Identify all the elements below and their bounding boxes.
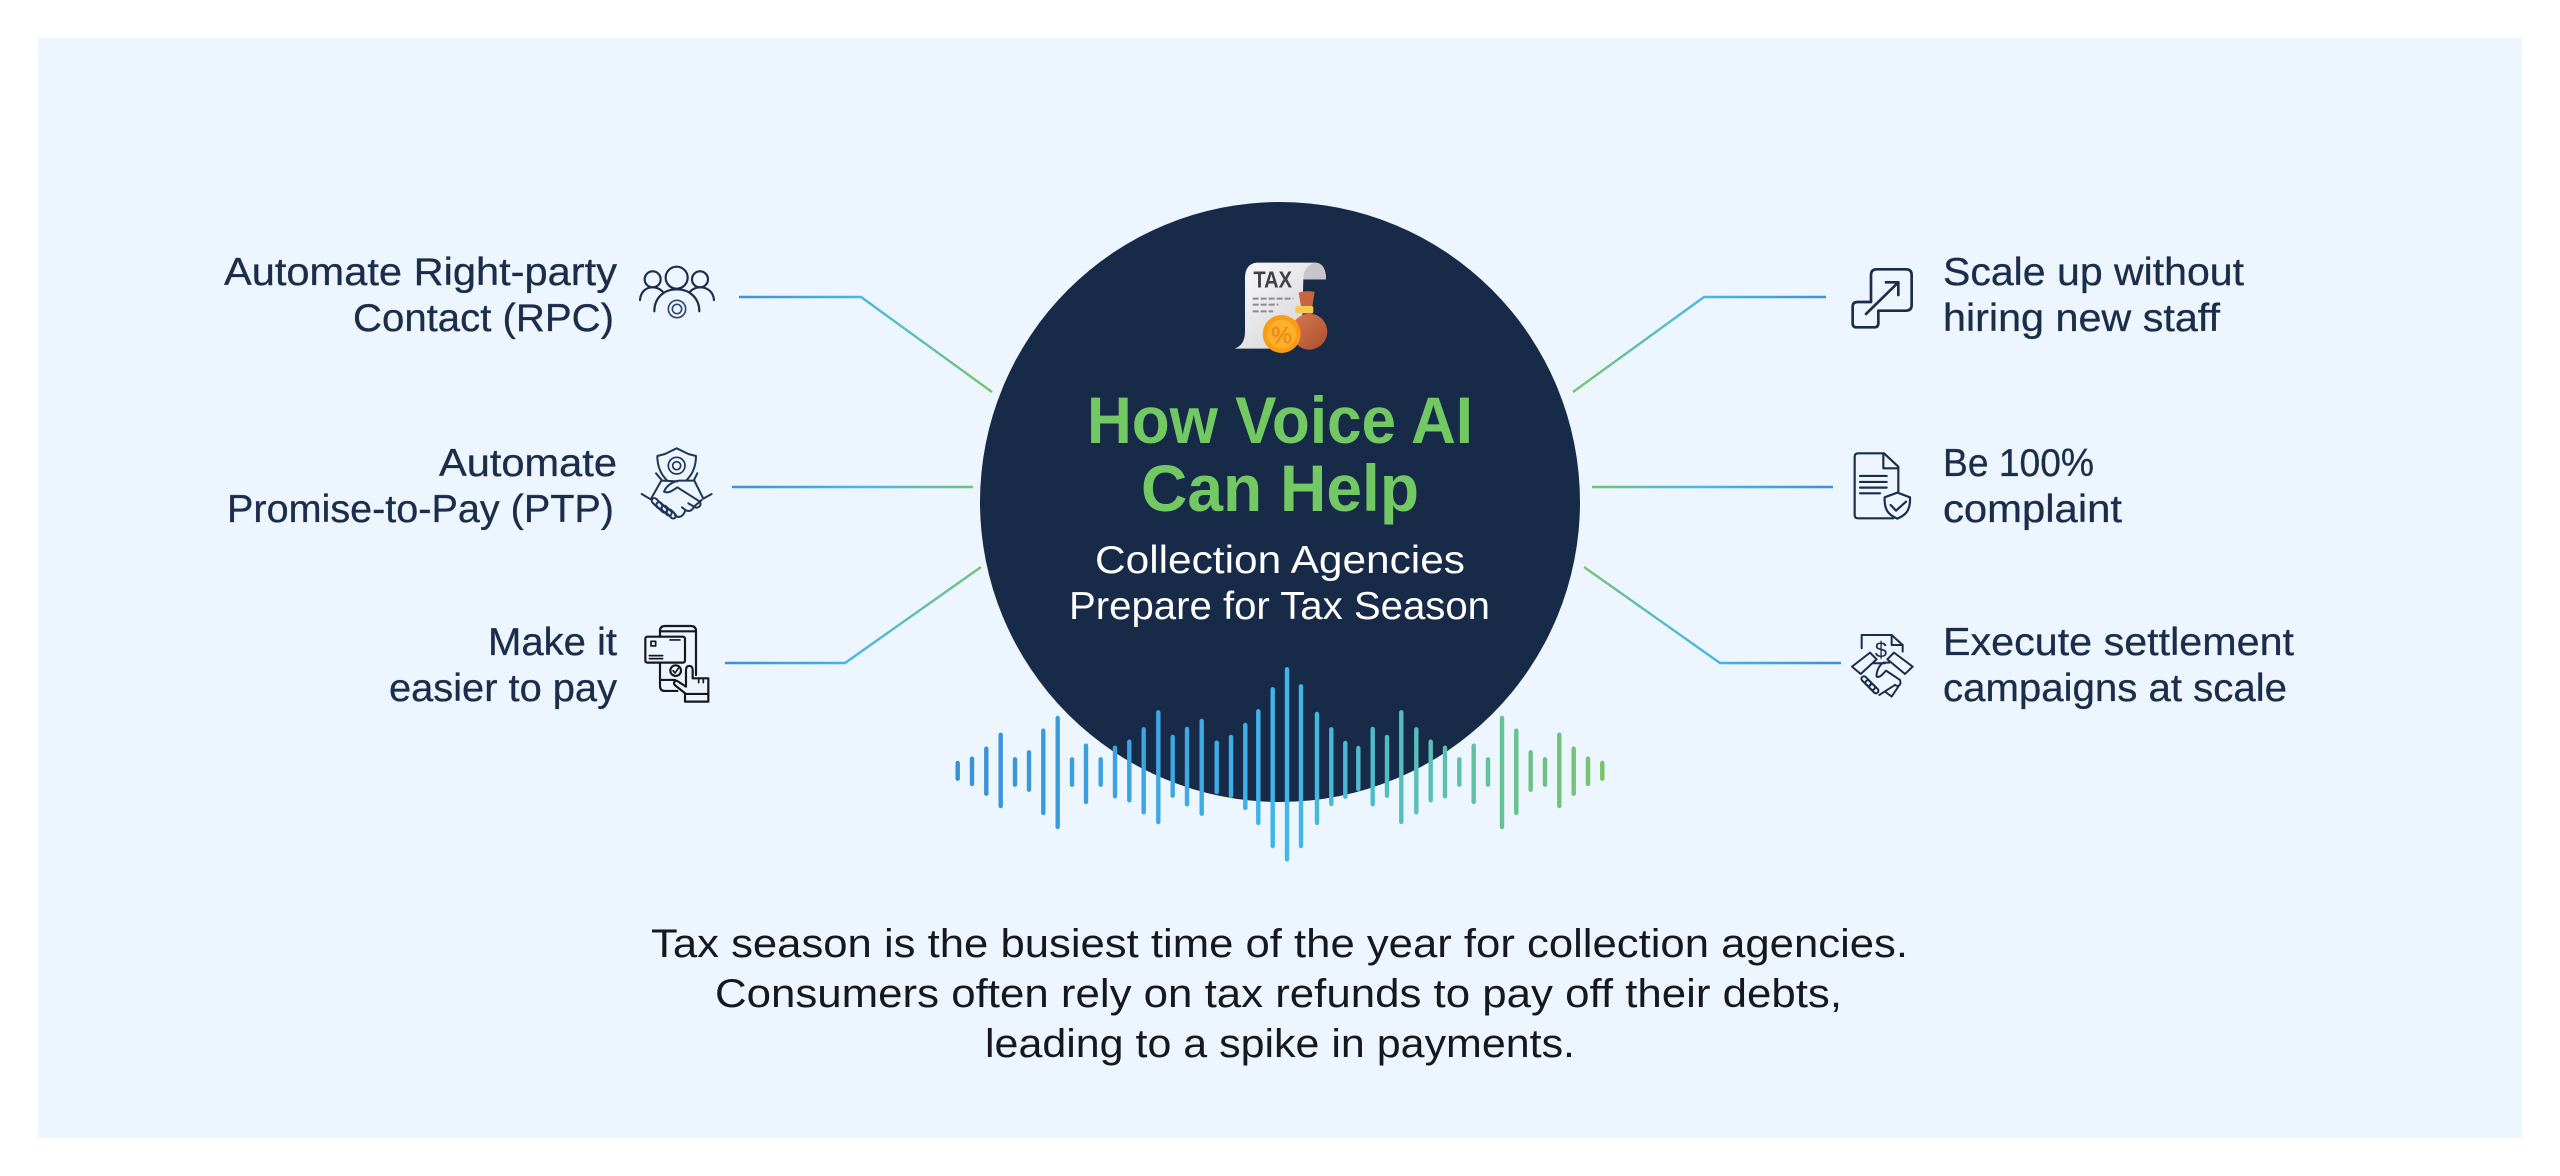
icon: document with shield — [1855, 453, 1910, 519]
icon: people with gear — [640, 267, 714, 318]
icon: scale up arrow — [1853, 269, 1912, 327]
subtitle — [1069, 539, 1490, 628]
label: Make it easier to pay: easier to pay — [389, 667, 617, 710]
subtitle: Prepare for Tax Season — [1069, 585, 1490, 628]
icon: tax document with coin and money bag: TAX — [1253, 267, 1292, 293]
label: Automate Promise-to-Pay (PTP) — [227, 442, 617, 531]
connector lines right — [1573, 297, 1841, 663]
label: Make it easier to pay: Make it — [488, 621, 617, 664]
label: Execute settlement campaigns at scale: campaigns at scale — [1943, 667, 2287, 710]
icon: tax document with coin and money bag: % — [1271, 322, 1292, 349]
footer text: Consumers often rely on tax refunds to pay off their debts, — [715, 972, 1842, 1016]
label: Scale up without hiring new staff: Scale up without — [1943, 251, 2244, 294]
connector lines left — [725, 297, 992, 663]
central circle — [980, 202, 1580, 802]
sound wave — [958, 669, 1602, 859]
icon: shield and handshake — [642, 448, 712, 520]
label: Execute settlement campaigns at scale — [1943, 621, 2294, 710]
label: Scale up without hiring new staff — [1943, 251, 2244, 340]
icon: tax document with coin and money bag — [1235, 263, 1327, 353]
footer text: Tax season is the busiest time of the year for collection agencies. — [651, 922, 1908, 966]
footer text: leading to a spike in payments. — [985, 1022, 1575, 1066]
title — [1087, 383, 1473, 525]
footer text — [651, 922, 1908, 1066]
label: Execute settlement campaigns at scale: Execute settlement — [1943, 621, 2294, 664]
label: Make it easier to pay — [389, 621, 617, 710]
icon: settlement handshake with dollar document: $ — [1875, 637, 1887, 662]
icon: settlement handshake with dollar document — [1852, 635, 1913, 697]
label: Automate Right-party Contact (RPC): Automate Right-party — [224, 251, 618, 294]
label: Automate Right-party Contact (RPC) — [224, 251, 618, 340]
label: Be 100% complaint: Be 100% — [1943, 442, 2094, 485]
title: How Voice AI — [1087, 383, 1473, 457]
icon: phone, card and hand — [645, 626, 708, 702]
subtitle: Collection Agencies — [1095, 539, 1465, 582]
label: Be 100% complaint — [1943, 442, 2122, 531]
label: Scale up without hiring new staff: hiring new staff — [1943, 297, 2220, 340]
label: Be 100% complaint: complaint — [1943, 488, 2122, 531]
label: Automate Promise-to-Pay (PTP): Promise-to-Pay (PTP) — [227, 488, 614, 531]
label: Automate Right-party Contact (RPC): Contact (RPC) — [353, 297, 614, 340]
label: Automate Promise-to-Pay (PTP): Automate — [439, 442, 617, 485]
title: Can Help — [1141, 451, 1419, 525]
